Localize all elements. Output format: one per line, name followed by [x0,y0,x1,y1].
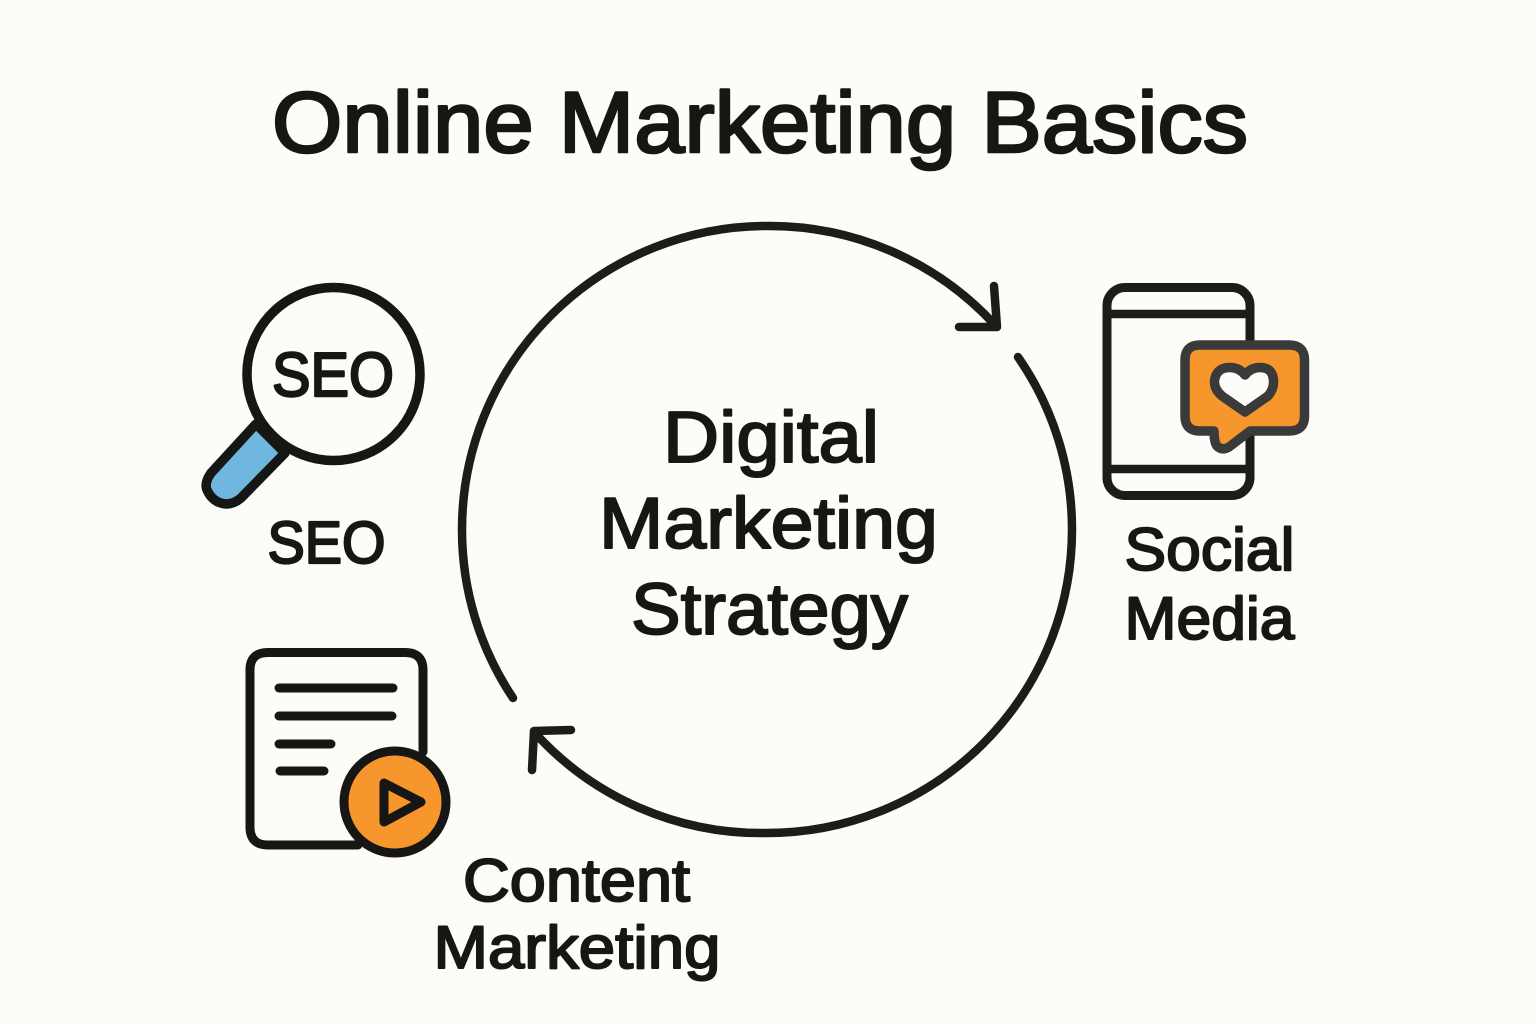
cycle diagram [462,226,1072,833]
icon: SEO magnifying glass [206,288,420,504]
arrow: top arc to social media [462,226,997,698]
center text: Digital Marketing Strategy: Digital [663,398,879,478]
label: Social Media: Social [1124,516,1294,583]
label: Social Media: Media [1124,585,1295,652]
title: Online Marketing Basics [272,75,1248,171]
icon: SEO magnifying glass: SEO [272,341,394,410]
icon: smartphone with heart bubble [1107,288,1304,496]
label: Social Media [1124,516,1295,652]
center text: Digital Marketing Strategy [599,398,938,650]
arrow: bottom arc to content marketing [532,357,1072,833]
label: Content Marketing [434,847,720,981]
label: SEO: SEO [268,510,386,576]
label: Content Marketing: Marketing [434,914,720,981]
icon: document with play button [250,652,446,853]
label: Content Marketing: Content [463,847,690,914]
center text: Digital Marketing Strategy: Marketing [599,484,938,564]
center text: Digital Marketing Strategy: Strategy [631,570,908,650]
